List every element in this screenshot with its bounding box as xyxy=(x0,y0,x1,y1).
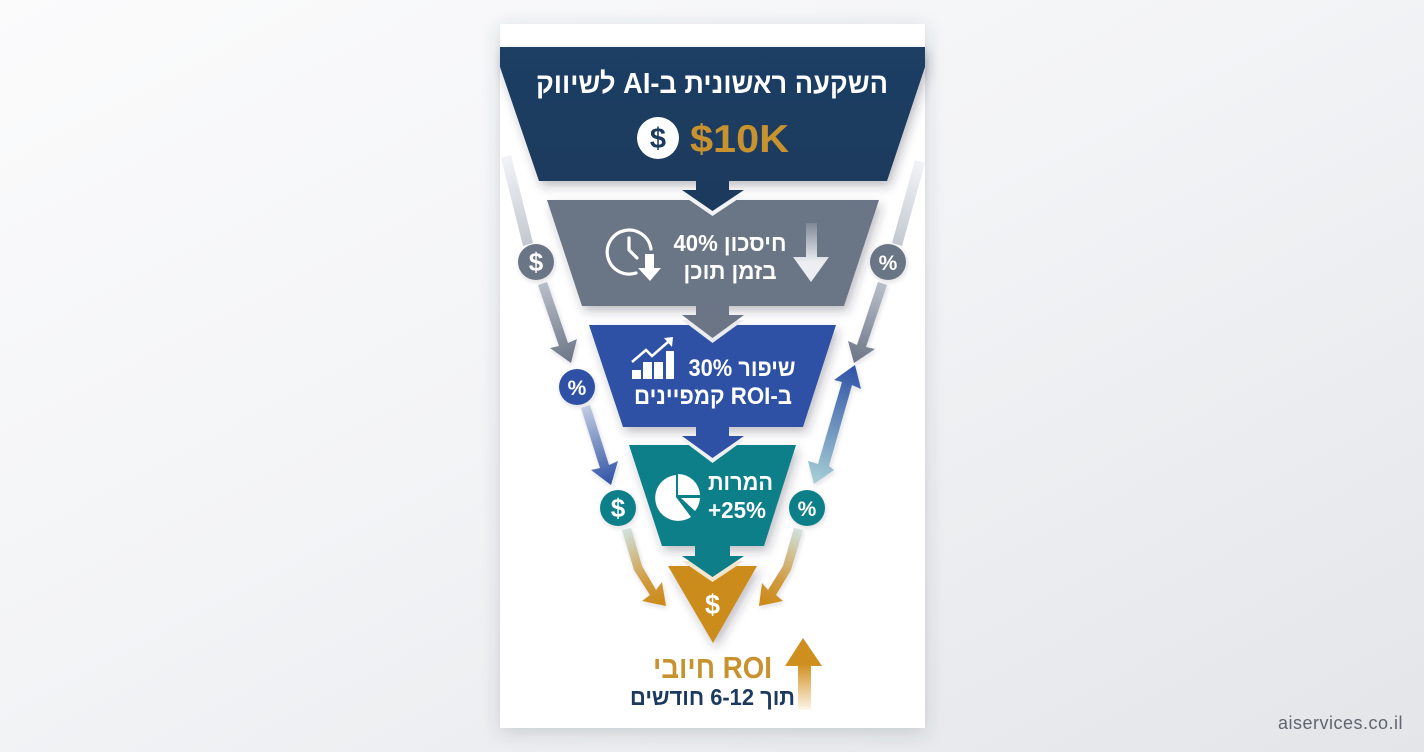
badge: percent right 1: % xyxy=(879,252,898,275)
text: within 6-12 months: תוך 6-12 חודשים xyxy=(630,684,795,710)
badge: dollar left 1 xyxy=(518,244,554,280)
panel: infographic card xyxy=(500,24,925,728)
funnel stage 2: time saving xyxy=(547,181,879,306)
arrow: blue down connector xyxy=(682,427,744,463)
badge: percent right 2: % xyxy=(798,498,817,521)
text: conversions: המרות xyxy=(708,469,773,495)
funnel stage 3: ROI improvement xyxy=(589,306,836,427)
arrow: gray left xyxy=(538,282,577,363)
arrow: teal down connector xyxy=(682,546,744,582)
faded connector: left top xyxy=(501,155,533,246)
text: positive ROI: ROI חיובי xyxy=(653,650,772,685)
arrow: up xyxy=(785,638,822,710)
panel shape gold xyxy=(668,566,757,643)
arrow: decreasing xyxy=(793,223,829,282)
amount: $10K xyxy=(690,118,789,161)
panel shape gray xyxy=(547,200,879,306)
funnel stage 1: investment xyxy=(500,47,925,181)
icon: dollar: $ xyxy=(705,589,720,620)
right side flow arrows xyxy=(759,160,925,606)
arrow: gold right xyxy=(759,528,803,606)
arrow: blue left xyxy=(581,405,618,485)
badge: percent left: % xyxy=(568,377,587,400)
text: 40% saving: חיסכון 40% xyxy=(674,230,786,256)
text: 30% improvement: שיפור 30% xyxy=(688,355,796,382)
arrow: navy down connector xyxy=(682,181,744,216)
badge: percent right 1 xyxy=(870,244,906,280)
arrow: gold left xyxy=(622,528,666,606)
heading: השקעה ראשונית ב-AI לשיווק xyxy=(536,68,888,100)
icon: dollar coin xyxy=(637,117,679,159)
badge: percent right 2 xyxy=(789,490,825,526)
panel shape teal xyxy=(629,445,796,546)
icon: dollar coin: $ xyxy=(650,123,666,155)
panel shape blue xyxy=(589,325,836,427)
arrow: blue-teal double xyxy=(808,365,861,484)
badge: dollar left 2: $ xyxy=(611,493,626,523)
arrow: gray down connector xyxy=(682,306,744,343)
panel shape navy xyxy=(500,47,925,181)
icon: pie chart xyxy=(655,474,700,521)
text: content time: בזמן תוכן xyxy=(684,258,776,284)
faded connector: right top xyxy=(892,160,925,246)
left side flow arrows xyxy=(501,155,666,606)
arrow: gray right xyxy=(848,282,887,363)
result block xyxy=(630,638,822,710)
badge: percent left xyxy=(559,369,595,405)
icon: growth chart xyxy=(632,337,674,379)
funnel stage 4: conversions xyxy=(629,427,796,546)
badge: dollar left 1: $ xyxy=(529,247,544,277)
watermark: aiservices.co.il xyxy=(1278,713,1403,733)
funnel stage 5: gold tip xyxy=(668,546,757,643)
icon: clock with arrow xyxy=(607,230,661,281)
text: campaign ROI: ב-ROI קמפיינים xyxy=(634,383,792,410)
badge: dollar left 2 xyxy=(600,490,636,526)
text: plus 25%: +25% xyxy=(708,497,766,523)
